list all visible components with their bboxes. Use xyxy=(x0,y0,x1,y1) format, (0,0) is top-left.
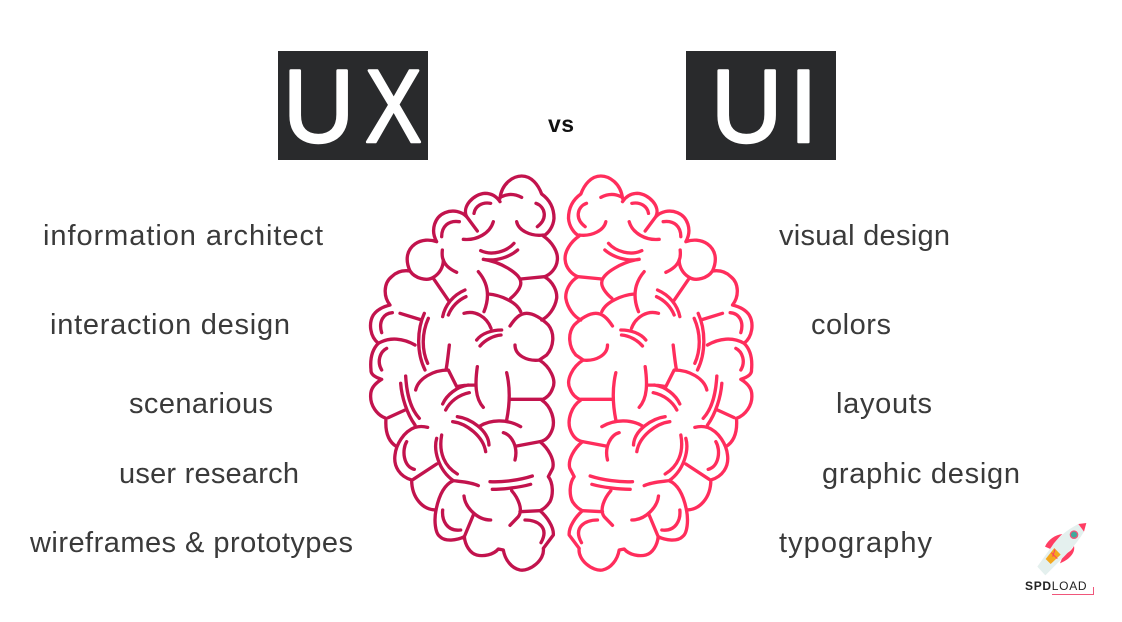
brain: right hemisphere (UI) xyxy=(565,176,752,570)
UI skills list: colors xyxy=(811,309,891,341)
brain: left hemisphere (UX) xyxy=(371,176,557,570)
UI badge xyxy=(686,49,836,165)
vs label: vs xyxy=(548,111,574,137)
UX skills list xyxy=(29,220,353,559)
UX badge xyxy=(278,49,428,165)
UI skills list xyxy=(779,220,1020,559)
UX skills list: user research xyxy=(119,458,299,490)
UI skills list: graphic design xyxy=(822,458,1020,490)
UX badge: X xyxy=(365,49,422,165)
UI badge: U xyxy=(711,49,782,165)
UI skills list: layouts xyxy=(836,388,932,420)
UX skills list: scenarious xyxy=(129,388,273,420)
logo wordmark: SPDLOAD xyxy=(1025,579,1087,593)
UI skills list: typography xyxy=(779,527,932,559)
icon: rocket logo xyxy=(1037,523,1086,575)
UX badge: U xyxy=(283,49,354,165)
UX skills list: interaction design xyxy=(50,309,290,341)
UX skills list: wireframes & prototypes xyxy=(29,527,353,559)
UI skills list: visual design xyxy=(779,220,950,252)
UI badge: I xyxy=(789,49,818,165)
UX skills list: information architect xyxy=(43,220,323,252)
